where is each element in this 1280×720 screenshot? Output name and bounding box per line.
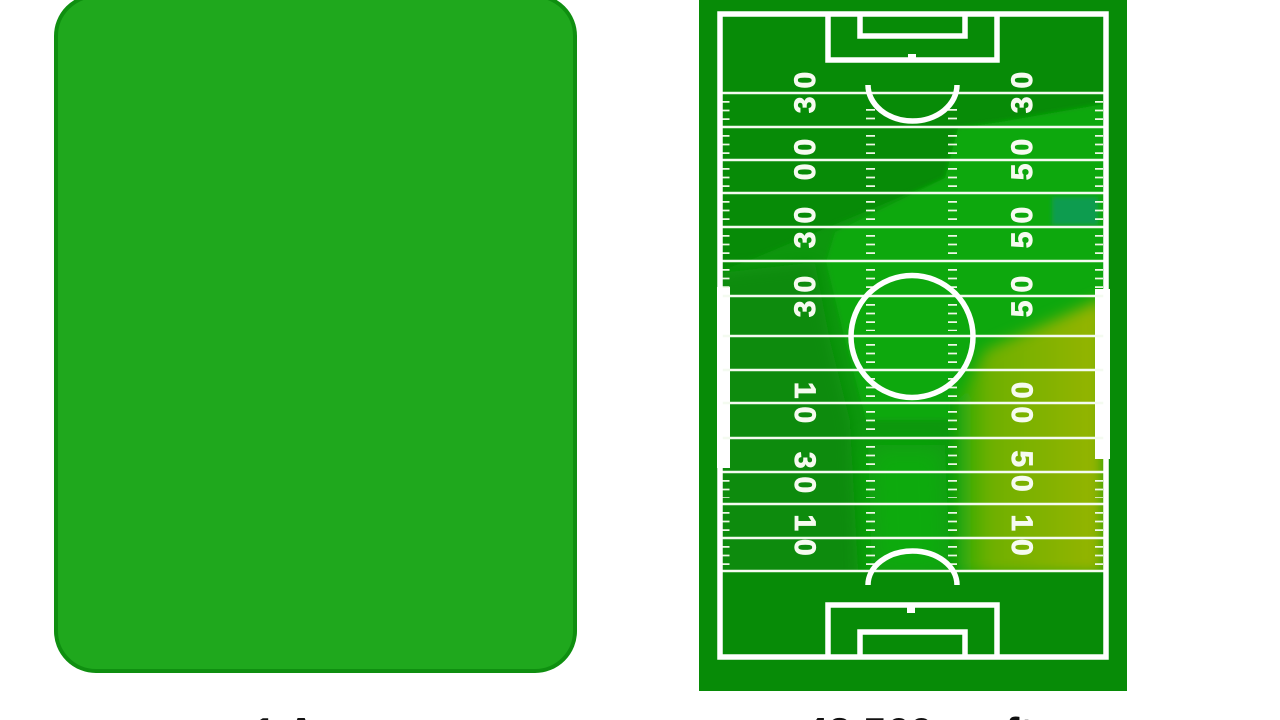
yard numbers: 50 <box>1006 199 1039 248</box>
yard numbers: 00 <box>789 131 822 180</box>
panel: one acre green card <box>56 0 575 671</box>
field boundary and boxes <box>720 14 1106 657</box>
penalty spots <box>907 54 916 613</box>
yard numbers: 30 <box>789 268 822 317</box>
yard numbers: 30 <box>789 64 822 113</box>
side bands <box>717 287 1110 468</box>
hash marks <box>726 101 1099 565</box>
turf colour variation <box>723 103 1104 570</box>
field turf <box>699 0 1127 691</box>
yard numbers: 30 <box>1006 64 1039 113</box>
arcs and centre circle <box>851 85 973 585</box>
yard numbers: 50 <box>1006 268 1039 317</box>
yard numbers: 50 <box>1005 450 1038 500</box>
yard numbers: 00 <box>1005 382 1038 431</box>
yard numbers <box>788 64 1039 564</box>
yard lines <box>720 93 1108 571</box>
yard numbers: 10 <box>1005 514 1038 564</box>
yard numbers: 30 <box>788 452 821 501</box>
yard numbers: 30 <box>789 199 822 248</box>
yard numbers: 10 <box>788 514 821 564</box>
yard numbers: 50 <box>1006 131 1039 180</box>
yard numbers: 10 <box>788 382 821 431</box>
panel: sports field <box>699 0 1127 691</box>
